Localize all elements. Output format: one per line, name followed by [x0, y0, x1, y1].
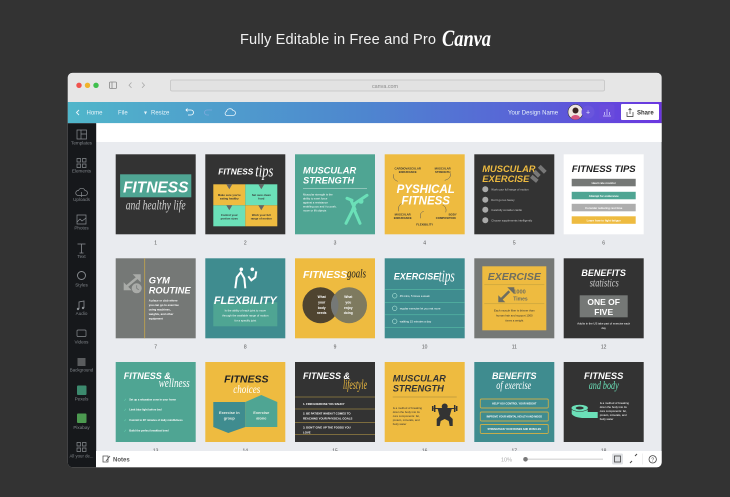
- design card 2: fitness tips: Control your: [221, 213, 239, 217]
- design card 6: fitness tips list: Consider reducing rest time: [585, 206, 623, 210]
- design card 14: fitness choices: Exercise in: [219, 410, 240, 415]
- sidebar: Text: [77, 254, 86, 259]
- design card 4: physical fitness: BODY: [449, 212, 457, 216]
- page numbers: 5: [513, 240, 516, 246]
- design card 5: muscular exercise: [474, 154, 554, 234]
- design card 8: flexibility: [205, 258, 285, 338]
- design card 4: physical fitness: CARDIOVASCULAR: [395, 166, 421, 170]
- bottom bar: [96, 451, 662, 468]
- design card 15: fitness and lifestyle: [295, 362, 375, 442]
- design card 16: muscular strength yellow: body water: [393, 422, 406, 426]
- design card 4: physical fitness: ENDURANCE: [399, 170, 417, 174]
- design card 11: exercise 1000 times: [474, 258, 554, 338]
- design card 18: fitness and body: Is a method of breaking: [600, 401, 629, 405]
- design card 9: fitness goals: enjoy: [344, 306, 353, 310]
- design card 6: fitness tips list: Attempt for endurance: [589, 194, 619, 198]
- design card 13: fitness and wellness: ✓: [124, 429, 127, 433]
- design card 3: muscular strength: MUSCULAR: [303, 165, 356, 175]
- sidebar: Videos: [75, 340, 89, 344]
- design card 14: fitness choices: group: [224, 416, 235, 420]
- page numbers: 3: [334, 240, 337, 246]
- design card 10: exercise tips: walking 15 minutes a day: [400, 319, 432, 323]
- design card 2: fitness tips: tips: [255, 161, 274, 180]
- design card 9: fitness goals: What: [318, 295, 327, 299]
- design card 11: exercise 1000 times: EXERCISE: [488, 271, 542, 283]
- bottom bar: 10%: [501, 458, 512, 464]
- sidebar: Uploads: [73, 197, 91, 202]
- design card 6: fitness tips list: Learn how to fight fatigue: [587, 218, 621, 222]
- design card 12: benefits statistics: BENEFITS: [581, 268, 626, 278]
- design card 7: gym routine: GYM: [149, 275, 170, 285]
- design card 2: fitness tips: eating healthy: [220, 196, 239, 200]
- design card 14: fitness choices: choices: [233, 382, 261, 396]
- editor toolbar: Share: [637, 110, 654, 116]
- design card 4: physical fitness: PYSHICAL: [397, 184, 455, 196]
- title: [240, 26, 491, 51]
- design card 13: fitness and wellness: Commit to 20' minutes of daily mindfulness: [129, 418, 183, 422]
- page numbers: 6: [602, 240, 605, 246]
- design card 7: gym routine: you can go to exercise: [149, 303, 179, 307]
- design card 13: fitness and wellness: ✓: [124, 418, 127, 422]
- design card 16: muscular strength yellow: Is a method of breaking: [393, 406, 422, 410]
- page numbers: 4: [423, 240, 426, 246]
- editor toolbar: [68, 102, 662, 123]
- design card 14: fitness choices: [205, 362, 285, 442]
- design card 2: fitness tips: Make sure you're: [218, 193, 241, 197]
- page numbers: 12: [601, 344, 607, 350]
- design card 5: muscular exercise: MUSCULAR: [482, 164, 536, 174]
- design card 17: benefits of exercise: STRENGTHEN YOUR BONES AND MUSCLES: [487, 428, 541, 431]
- design card 18: fitness and body: and body: [589, 380, 619, 392]
- design card 7: gym routine: [116, 258, 196, 338]
- design card 4: physical fitness: COMPOSITION: [436, 216, 456, 220]
- sidebar: Styles: [75, 282, 88, 288]
- design card 2: fitness tips: FITNESS: [218, 166, 254, 176]
- design card 18: fitness and body: protein, minerals, and: [600, 413, 627, 417]
- design card 9: fitness goals: needs: [317, 311, 327, 315]
- design card 17: benefits of exercise: [474, 362, 554, 442]
- design card 9: fitness goals: [295, 258, 375, 338]
- design card 13: fitness and wellness: Limit blue light before bed: [129, 408, 162, 412]
- sidebar: Templates: [71, 140, 93, 146]
- design card 11: exercise 1000 times: Each muscle fiber is thinner than: [494, 308, 535, 312]
- design card 5: muscular exercise: Work your full range of motion: [491, 187, 529, 191]
- design card 15: fitness and lifestyle: FITNESS &: [303, 371, 350, 381]
- design card 18: fitness and body: core components: fat,: [600, 409, 627, 413]
- design card 3: muscular strength: ability to exert force: [303, 196, 328, 200]
- design card 3: muscular strength: STRENGTH: [303, 175, 354, 185]
- design card 15: fitness and lifestyle: 1. FIND EXERCISE YOU ENJOY: [303, 402, 345, 406]
- design card 5: muscular exercise: EXERCISE: [482, 174, 530, 184]
- design card 17: benefits of exercise: of exercise: [496, 380, 531, 392]
- editor toolbar: Your Design Name: [508, 110, 559, 116]
- page numbers: 9: [334, 344, 337, 350]
- design card 4: physical fitness: [385, 154, 465, 234]
- design card 11: exercise 1000 times: times a weight: [505, 318, 523, 322]
- design card 4: physical fitness: MUSCULAR: [435, 166, 451, 170]
- design card 3: muscular strength: enabling you and i to push,: [303, 204, 337, 208]
- design card 2: fitness tips: [205, 154, 285, 234]
- page numbers: 16: [422, 448, 428, 454]
- design card 14: fitness choices: Exercise: [253, 410, 270, 415]
- page numbers: 15: [332, 448, 338, 454]
- page numbers: 7: [154, 344, 157, 350]
- editor toolbar: File: [118, 110, 128, 116]
- blank strip: [96, 123, 662, 142]
- design card 2: fitness tips: portion sizes: [221, 216, 238, 220]
- design card 9: fitness goals: your: [318, 300, 326, 304]
- design card 9: fitness goals: doing: [344, 311, 353, 315]
- design card 5: muscular exercise: Choose supplements intelligently: [491, 218, 533, 222]
- design card 12: benefits statistics: FIVE: [594, 307, 613, 317]
- design card 14: fitness choices: alone: [256, 416, 267, 420]
- design card 8: flexibility: Is the ability of each joint to move: [225, 308, 266, 312]
- browser title bar: [68, 73, 662, 102]
- design card 17: benefits of exercise: IMPROVE YOUR MENTAL HEALTH AND MOOD: [487, 416, 542, 418]
- design card 2: fitness tips: range of motion: [251, 216, 272, 220]
- editor toolbar: +: [586, 110, 590, 116]
- editor toolbar: Home: [86, 110, 103, 116]
- sidebar: All your de...: [70, 454, 93, 458]
- design card 16: muscular strength yellow: protein, minerals, and: [393, 418, 420, 422]
- design card 12: benefits statistics: statistics: [590, 275, 619, 289]
- design card 4: physical fitness: FLEXIBILITY: [416, 222, 433, 226]
- design card 10: exercise tips: tips: [439, 266, 455, 285]
- sidebar: Audio: [76, 311, 88, 316]
- sidebar: Elements: [72, 168, 92, 174]
- sidebar: Pexels: [75, 396, 89, 402]
- design card 4: physical fitness: ENDURANCE: [394, 216, 412, 220]
- sidebar: Pixabay: [73, 425, 90, 430]
- design card 15: fitness and lifestyle: 2. BE PATIENT WHEN IT COMES TO: [303, 412, 351, 416]
- design card 16: muscular strength yellow: [385, 362, 465, 442]
- sidebar: Photos: [74, 226, 89, 230]
- design card 18: fitness and body: [564, 362, 644, 442]
- design card 3: muscular strength: [295, 154, 375, 234]
- design card 9: fitness goals: you: [345, 300, 351, 304]
- design card 9: fitness goals: FITNESS: [303, 269, 347, 281]
- design card 10: exercise tips: regular exercise let you eat more: [400, 306, 441, 310]
- design card 2: fitness tips: Set sure clean: [252, 193, 271, 197]
- design card 1: fitness: and healthy life: [126, 198, 186, 213]
- sidebar: Background: [70, 368, 94, 372]
- design card 13: fitness and wellness: ✓: [124, 398, 127, 402]
- design card 4: physical fitness: STRENGTH: [435, 170, 450, 174]
- design card 13: fitness and wellness: [116, 362, 196, 442]
- design card 6: fitness tips list: FITNESS TIPS: [572, 164, 636, 175]
- design card 10: exercise tips: 45 mins, 5 times a week: [400, 294, 430, 298]
- design card 4: physical fitness: FITNESS: [401, 195, 450, 207]
- design card 18: fitness and body: FITNESS: [584, 371, 624, 381]
- page numbers: 2: [244, 240, 247, 246]
- design card 16: muscular strength yellow: MUSCULAR: [393, 374, 446, 384]
- sidebar: [68, 123, 96, 467]
- design card 12: benefits statistics: Adults in the US take part of exercise each: [577, 321, 631, 325]
- editor toolbar: ▾: [144, 110, 147, 116]
- design card 13: fitness and wellness: Set up a relaxation zone in your home: [129, 398, 176, 402]
- design card 1: fitness: [116, 154, 196, 234]
- design card 9: fitness goals: goals: [347, 265, 366, 280]
- design card 5: muscular exercise: Carefully consider cardio: [491, 208, 523, 212]
- page numbers: [153, 240, 607, 454]
- design card 12: benefits statistics: [564, 258, 644, 338]
- design card 15: fitness and lifestyle: REACHING YOUR PHYSICAL GOALS: [303, 416, 352, 420]
- design card 8: flexibility: FLEXBILITY: [214, 295, 278, 307]
- editor toolbar: Resize: [151, 110, 170, 116]
- browser title bar: canva.com: [372, 84, 399, 90]
- design card 2: fitness tips: food: [258, 196, 265, 200]
- design card 14: fitness choices: FITNESS: [224, 374, 268, 386]
- design card 7: gym routine: using machines,: [149, 307, 171, 311]
- design card 10: exercise tips: [385, 258, 465, 338]
- design card 11: exercise 1000 times: Times: [513, 296, 528, 302]
- design card 7: gym routine: weights, and other: [148, 312, 174, 316]
- page numbers: 17: [512, 448, 517, 454]
- design card 15: fitness and lifestyle: 3. DON'T GIVE UP THE FOODS YOU: [303, 426, 351, 430]
- design card 17: benefits of exercise: BENEFITS: [492, 371, 537, 381]
- design card 12: benefits statistics: ONE OF: [587, 297, 620, 307]
- design card 3: muscular strength: Muscular strength is the: [303, 192, 333, 196]
- page numbers: 1: [154, 240, 157, 246]
- design card 2: fitness tips: Work your full: [252, 213, 271, 217]
- design card 8: flexibility: for a specific joint: [234, 318, 256, 322]
- title: Fully Editable in Free and Pro: [240, 32, 436, 48]
- design card 15: fitness and lifestyle: LOVE: [303, 430, 311, 434]
- design card 18: fitness and body: body water: [600, 417, 613, 421]
- design card 9: fitness goals: What: [344, 295, 353, 299]
- design card 11: exercise 1000 times: 1000: [513, 289, 526, 295]
- design card 16: muscular strength yellow: STRENGTH: [393, 384, 444, 394]
- page numbers: 10: [422, 344, 428, 350]
- app window: [68, 73, 662, 468]
- design card 15: fitness and lifestyle: lifestyle: [343, 378, 367, 393]
- design card 8: flexibility: through the available range of motion: [222, 313, 269, 317]
- design card 16: muscular strength yellow: core components: fat,: [393, 414, 420, 418]
- design card 12: benefits statistics: day: [601, 326, 607, 330]
- design card 6: fitness tips list: [564, 154, 644, 234]
- design card 4: physical fitness: MUSCULAR: [395, 212, 411, 216]
- design card 3: muscular strength: move or lift objects: [303, 208, 327, 212]
- design card 13: fitness and wellness: Build the perfect breakfast bowl: [129, 428, 169, 432]
- design card 13: fitness and wellness: wellness: [159, 375, 190, 390]
- bottom bar: Notes: [113, 458, 130, 464]
- title: Canva: [442, 26, 491, 51]
- design card 1: fitness: FITNESS: [123, 179, 189, 196]
- design card 17: benefits of exercise: HELP YOU CONTROL YOUR WEIGHT: [492, 402, 537, 406]
- page numbers: 8: [244, 344, 247, 350]
- design card 13: fitness and wellness: ✓: [124, 408, 127, 412]
- design card 7: gym routine: ROUTINE: [149, 285, 191, 295]
- design card 10: exercise tips: EXERCISE: [394, 271, 440, 281]
- design card 7: gym routine: A place or club where: [149, 298, 178, 302]
- design card 13: fitness and wellness: FITNESS &: [124, 371, 171, 381]
- design card 7: gym routine: equipment: [149, 316, 163, 320]
- page numbers: 13: [153, 448, 159, 454]
- page numbers: 18: [601, 448, 607, 454]
- design card 6: fitness tips list: Heart rate monitor: [592, 181, 617, 185]
- design card 9: fitness goals: body: [318, 306, 326, 310]
- page numbers: 11: [512, 344, 517, 350]
- page numbers: 14: [243, 448, 248, 454]
- design card 16: muscular strength yellow: down the body into its: [393, 410, 420, 414]
- design card 11: exercise 1000 times: human hair and support 1000: [496, 313, 533, 317]
- bottom bar: ?: [651, 457, 654, 463]
- design card 5: muscular exercise: Don't go too heavy: [491, 198, 515, 202]
- design card 3: muscular strength: against a resistance: [303, 200, 328, 204]
- design card 18: fitness and body: down the body into its: [600, 405, 627, 409]
